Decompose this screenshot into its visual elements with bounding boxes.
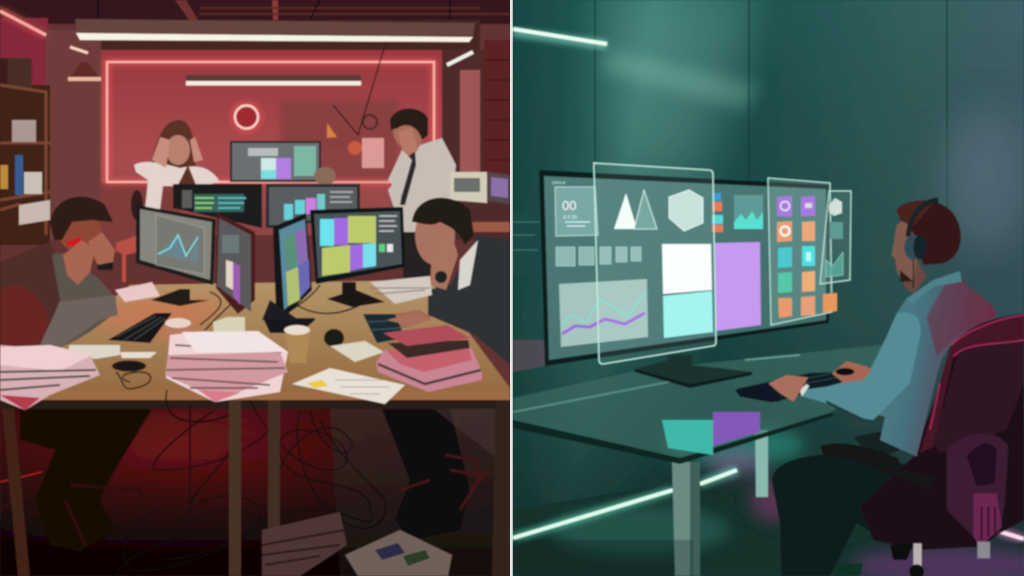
desk legs [672, 430, 768, 576]
floor neon strips [513, 470, 1024, 539]
torso shirt [827, 272, 997, 457]
light beams [600, 0, 760, 170]
headset [904, 200, 938, 288]
back monitor [230, 141, 321, 182]
left person legs and chair [0, 409, 152, 552]
dashboard widget [555, 187, 598, 236]
right hand [387, 312, 432, 326]
sleeve [802, 313, 921, 420]
floor [513, 475, 1024, 576]
wall glow [940, 110, 1024, 250]
coffee cups [165, 318, 310, 363]
mini chart [734, 195, 763, 229]
cyan tile [663, 291, 713, 338]
neon ring [234, 104, 260, 130]
lower wall haze [100, 183, 180, 253]
dashboard widget: 00 [562, 198, 576, 213]
screen label: DRIS.B [552, 180, 566, 185]
chair [860, 314, 1024, 576]
ceiling lamp [75, 19, 475, 44]
monitor [539, 170, 829, 366]
dashboard widget: 4 4 20 [563, 215, 577, 221]
armrest [820, 443, 933, 490]
side desk [116, 235, 138, 282]
line chart [559, 279, 648, 347]
monitor base, mouse and small items [69, 320, 344, 389]
watch [799, 384, 809, 397]
book stack [376, 325, 482, 392]
right wall and door [442, 50, 510, 240]
glass panel one [593, 163, 716, 364]
second lamp [186, 75, 361, 86]
desk [0, 280, 510, 409]
floor paper stacks [262, 512, 452, 576]
seated man [735, 200, 1024, 576]
hands [768, 361, 872, 402]
neck [900, 260, 927, 293]
keyboard [736, 372, 846, 402]
bookshelf [0, 58, 50, 245]
glass desk [513, 345, 890, 464]
floor [0, 409, 510, 576]
monitor stand [635, 355, 752, 388]
centre paper stack [165, 331, 288, 402]
purple tile [715, 242, 761, 331]
middle monitor right [266, 184, 360, 228]
right wall light [447, 52, 473, 65]
glass panel two [768, 178, 851, 325]
monitor: angled left [216, 213, 255, 314]
front right man [385, 198, 510, 365]
icon row [556, 247, 641, 266]
left paper stack [0, 345, 100, 410]
cables [115, 285, 386, 576]
reflection on glass wall [513, 213, 543, 275]
middle monitor left [173, 184, 262, 228]
hexagon gem [669, 190, 703, 231]
head [892, 200, 961, 282]
small box [213, 317, 245, 339]
woman [134, 120, 220, 210]
notebook [330, 341, 384, 362]
desk legs [2, 400, 510, 576]
neon frame [107, 62, 434, 182]
divider [510, 0, 513, 576]
keyboard left [108, 313, 172, 343]
far right monitors [450, 172, 510, 204]
left panel: chaotic office [0, 0, 510, 576]
shade [513, 540, 693, 576]
back person head [314, 167, 336, 185]
left wall [0, 18, 48, 198]
front left man [0, 197, 118, 350]
ceiling strip light [513, 29, 607, 45]
triangles [614, 190, 657, 229]
paper sheets [292, 368, 405, 404]
keyboard right [363, 314, 405, 343]
right panel: calm futuristic workspace [513, 0, 1024, 576]
chair behind woman [131, 190, 143, 220]
small icons [712, 193, 723, 232]
pink floor glow [850, 546, 1024, 576]
back wall [90, 45, 460, 235]
right person legs and chair [382, 409, 510, 540]
ceiling beams [98, 0, 510, 20]
papers behind [115, 276, 432, 304]
monitor: angled right [262, 213, 315, 320]
monitor: front left chart [136, 205, 216, 306]
white tile [662, 244, 712, 294]
legs [772, 432, 930, 576]
wall lamp [68, 47, 101, 81]
monitor: main right [310, 207, 405, 307]
standing man [388, 108, 456, 280]
keyboard top [735, 383, 780, 402]
wall seams [595, 0, 947, 340]
pinboard items [327, 45, 385, 168]
